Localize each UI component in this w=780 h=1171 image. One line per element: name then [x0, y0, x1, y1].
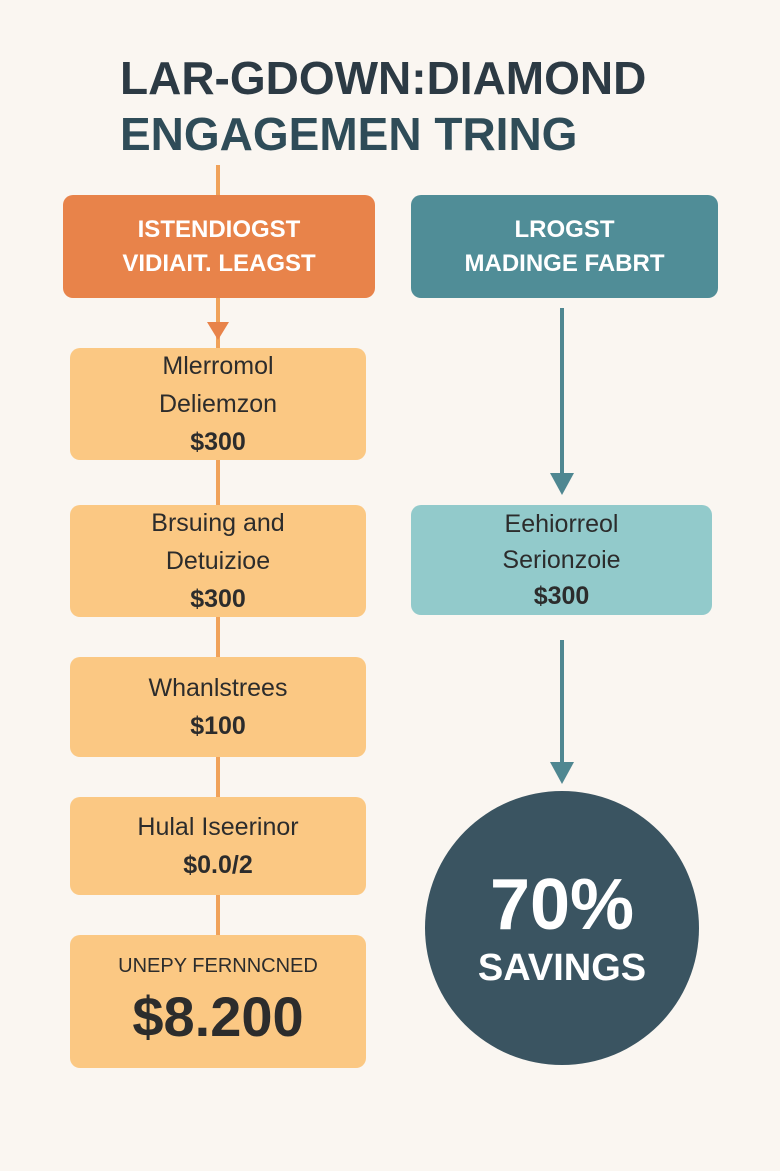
- box right: [411, 505, 712, 615]
- box right: Eehiorreol: [505, 510, 618, 538]
- arrow: left head: [207, 322, 229, 340]
- box 4: [70, 797, 366, 895]
- savings circle: 70%: [490, 865, 634, 945]
- title: [120, 52, 646, 160]
- arrow: left vertical line: [216, 165, 220, 935]
- savings circle: SAVINGS: [478, 947, 646, 989]
- box 1: [70, 348, 366, 460]
- box 3: Whanlstrees: [149, 674, 287, 702]
- box 3: [70, 657, 366, 757]
- header: right teal: [411, 195, 718, 298]
- box 2: Detuizioe: [166, 547, 270, 575]
- box 2: [70, 505, 366, 617]
- box 1: Mlerromol: [162, 352, 274, 380]
- box 1: Deliemzon: [159, 390, 277, 418]
- header: right teal: LROGST: [514, 216, 614, 242]
- box 5 total: UNEPY FERNNCNED: [118, 954, 318, 976]
- title: ENGAGEMEN TRING: [120, 108, 577, 160]
- header: left orange: ISTENDIOGST: [138, 216, 300, 242]
- box 2: $300: [190, 585, 246, 613]
- title: LAR-GDOWN:DIAMOND: [120, 52, 646, 104]
- box 5 total: [70, 935, 366, 1068]
- savings circle: [425, 791, 699, 1065]
- box right: $300: [534, 582, 589, 610]
- box 4: $0.0/2: [183, 851, 253, 879]
- box 2: Brsuing and: [151, 509, 285, 537]
- arrow: right bottom: [560, 640, 564, 765]
- header: left orange: VIDIAIT. LEAGST: [122, 250, 316, 276]
- box right: Serionzoie: [502, 546, 621, 574]
- header: right teal: MADINGE FABRT: [464, 250, 664, 276]
- box 3: $100: [190, 712, 246, 740]
- arrow: right top: [560, 308, 564, 478]
- box 4: Hulal Iseerinor: [137, 813, 299, 841]
- arrow: right bottom head: [550, 762, 574, 784]
- box 5 total: $8.200: [132, 984, 304, 1048]
- header: left orange: [63, 195, 375, 298]
- box 1: $300: [190, 428, 246, 456]
- arrow: right top head: [550, 473, 574, 495]
